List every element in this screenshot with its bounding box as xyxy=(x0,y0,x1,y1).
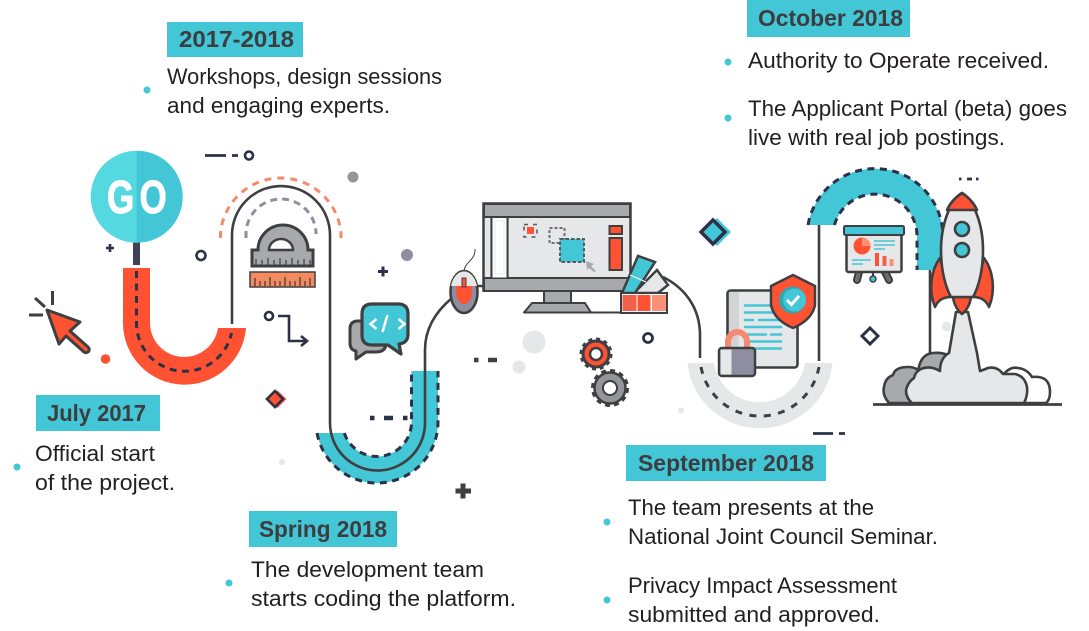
road: red U segment xyxy=(123,268,246,385)
text block: October 2018: live with real job postings. xyxy=(748,125,1005,150)
text block: 2017-2018: and engaging experts. xyxy=(167,93,390,118)
text block: 2017-2018 xyxy=(144,22,442,118)
icon: GO sign: GO xyxy=(107,171,172,223)
icon: computer monitor xyxy=(484,204,630,312)
text block: July 2017: of the project. xyxy=(35,470,175,495)
text block: September 2018: submitted and approved. xyxy=(628,602,880,627)
icon: GO sign xyxy=(91,151,183,265)
text block: October 2018 xyxy=(724,0,1067,150)
text block: July 2017: July 2017 xyxy=(47,400,146,426)
text block: October 2018: The Applicant Portal (beta) goes xyxy=(748,96,1067,121)
road: teal arch segment xyxy=(808,169,943,270)
text block: September 2018: National Joint Council Seminar. xyxy=(628,524,938,549)
connecting path line xyxy=(232,186,930,471)
road: grey U segment xyxy=(687,363,833,428)
text block: Spring 2018: The development team xyxy=(251,557,484,582)
text block: Spring 2018: starts coding the platform. xyxy=(251,586,516,611)
text block: September 2018: September 2018 xyxy=(638,450,814,476)
text block: September 2018: The team presents at the xyxy=(628,495,874,520)
text block: October 2018: Authority to Operate received. xyxy=(748,48,1049,73)
icon: gears xyxy=(581,339,628,406)
icon: presentation board xyxy=(844,226,904,282)
text block: Spring 2018 xyxy=(226,511,516,611)
text block: September 2018 xyxy=(604,445,938,627)
text block: 2017-2018: Workshops, design sessions xyxy=(167,64,442,89)
icon: colour swatches xyxy=(621,256,668,313)
text block: Spring 2018: Spring 2018 xyxy=(259,516,387,542)
icon: rocket with smoke xyxy=(873,193,1062,404)
icon: code speech bubbles xyxy=(350,304,408,359)
road: teal U segment xyxy=(317,371,438,483)
text block: July 2017 xyxy=(14,395,175,495)
icon: mouse xyxy=(450,249,484,313)
icon: cursor xyxy=(29,291,89,353)
monitor selection handles xyxy=(524,224,622,272)
icon: document, shield and lock xyxy=(719,275,815,376)
text block: September 2018: Privacy Impact Assessment xyxy=(628,573,898,598)
icon: protractor and ruler xyxy=(250,225,315,287)
text block: October 2018: October 2018 xyxy=(758,5,903,31)
dashed arcs over protractor xyxy=(220,178,341,239)
decorative small marks xyxy=(101,152,978,498)
text block: 2017-2018: 2017-2018 xyxy=(179,26,294,52)
text block: July 2017: Official start xyxy=(35,441,156,466)
